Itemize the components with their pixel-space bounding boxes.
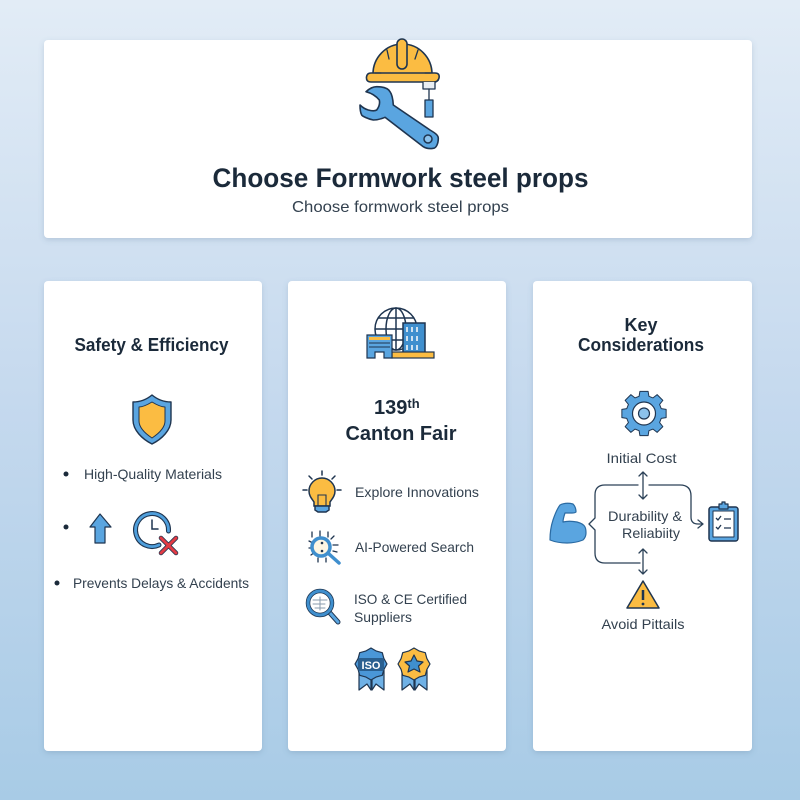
icon: gear — [622, 391, 666, 436]
icon: clipboard — [709, 502, 738, 541]
icon: clock with cross — [136, 514, 176, 553]
item: explore innovations — [303, 471, 479, 512]
icon: globe and buildings — [367, 308, 434, 358]
label: avoid pitfalls: Avoid Pittails — [602, 616, 684, 632]
subtitle: Choose formwork steel props — [292, 199, 509, 216]
icon: hard hat and wrench — [360, 39, 439, 149]
heading: 139th canton fair — [346, 396, 457, 445]
heading: key considerations — [578, 315, 704, 355]
icon: warning triangle — [627, 581, 659, 608]
icon: iso badge: ISO — [362, 660, 381, 672]
icon: star badge — [398, 648, 430, 690]
heading: key considerations: Key — [624, 315, 658, 335]
flow diagram arrows — [589, 472, 703, 574]
item: iso and ce certified suppliers: Suppliers — [354, 609, 412, 625]
panel: safety and efficiency — [44, 281, 262, 751]
icon: magnifier — [308, 591, 338, 622]
label: durability and reliability — [608, 508, 683, 541]
panel: key considerations — [533, 281, 752, 751]
icon: light bulb — [303, 471, 341, 512]
item: ai-powered search — [309, 531, 474, 563]
icon: up arrow — [90, 514, 111, 543]
heading: 139th canton fair: 139 — [374, 397, 407, 419]
bullet: arrow and clock icons — [64, 514, 176, 553]
icon: flexed arm — [550, 503, 586, 543]
heading: 139th canton fair: Canton Fair — [346, 423, 457, 445]
heading: key considerations: Considerations — [578, 335, 704, 355]
item: iso and ce certified suppliers — [308, 591, 467, 625]
icon: shield — [133, 395, 171, 444]
label: initial cost: Initial Cost — [606, 450, 677, 466]
label: durability and reliability: Reliabiity — [622, 525, 680, 541]
panel: canton fair — [288, 281, 506, 751]
icon: ai magnifier — [309, 531, 339, 563]
item: iso and ce certified suppliers: ISO & CE Certified — [354, 591, 467, 607]
icon: iso badge — [355, 648, 387, 690]
heading: 139th canton fair: th — [407, 396, 420, 411]
panel: header — [44, 39, 752, 238]
title: Choose Formwork steel props — [212, 163, 588, 193]
bullet: prevents delays and accidents: Prevents Delays & Accidents — [73, 575, 249, 591]
heading: safety and efficiency: Safety & Efficiency — [74, 335, 228, 355]
item: explore innovations: Explore Innovations — [355, 484, 479, 500]
item: ai-powered search: AI-Powered Search — [355, 539, 474, 555]
label: durability and reliability: Durability & — [608, 508, 683, 524]
bullet: high-quality materials: High-Quality Materials — [84, 466, 222, 482]
